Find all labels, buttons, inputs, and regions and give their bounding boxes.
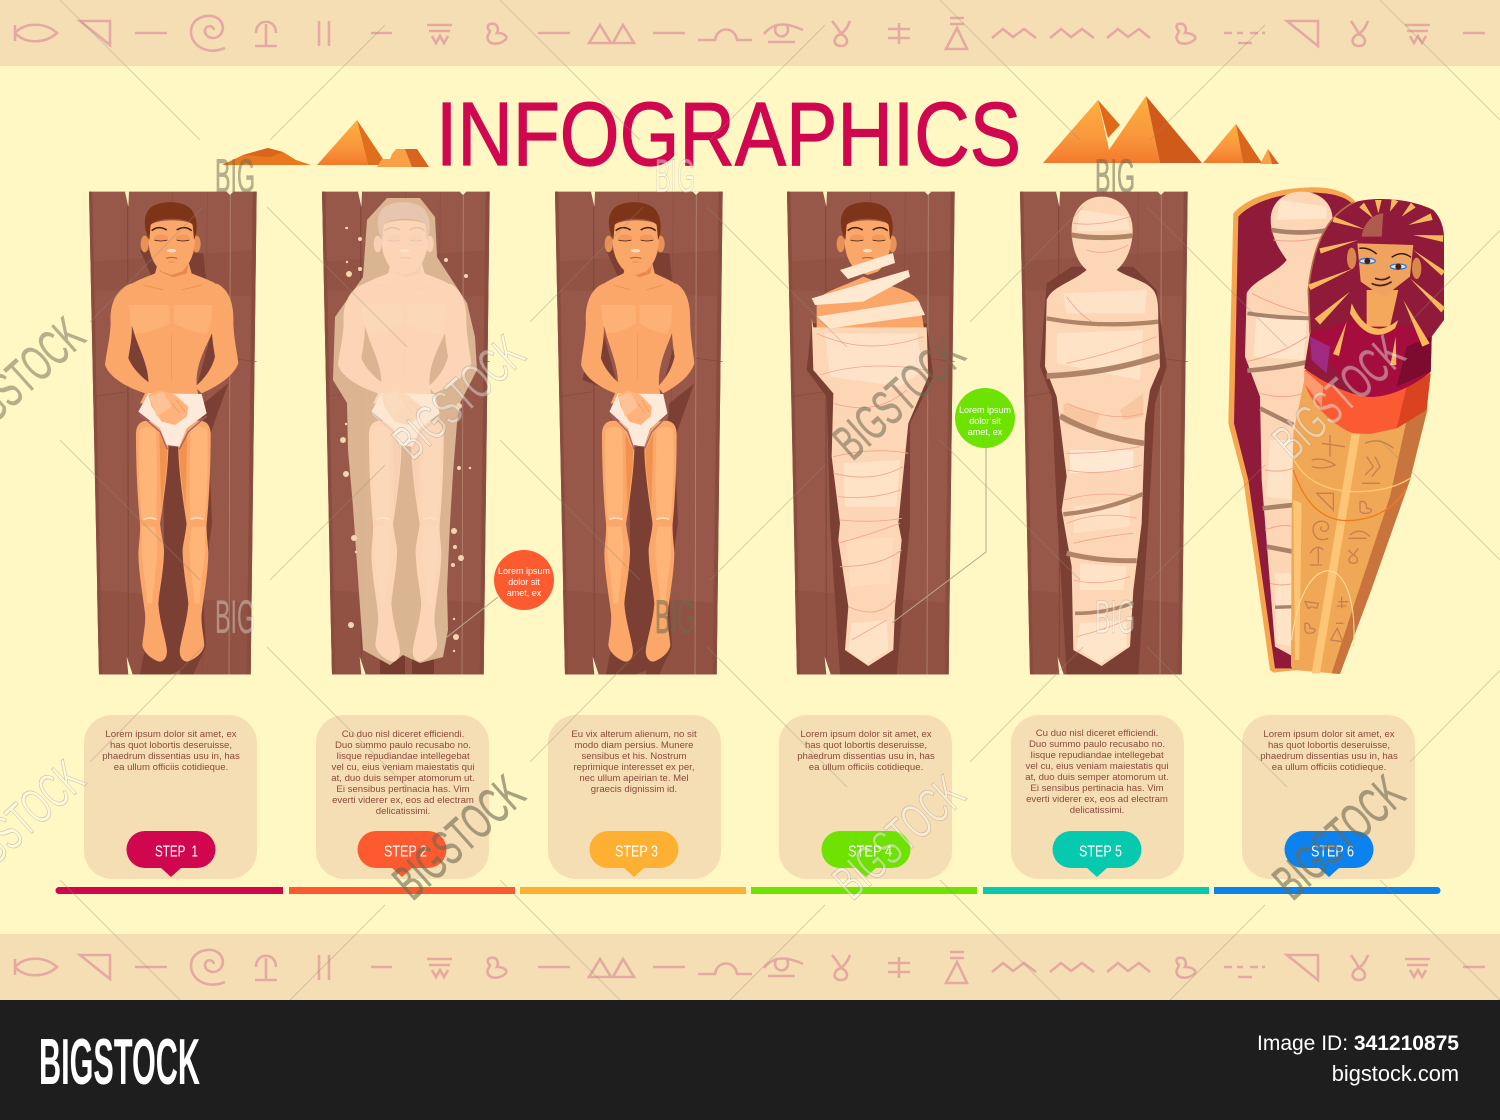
watermark: BIG stamps [215,149,1135,643]
watermark: BIG stamps: BIG [655,149,695,202]
step 1 text: ea ullum officiis cotidieque. [114,762,228,773]
callout: red circle with connector: amet, ex [507,588,542,598]
watermark: BIGSTOCK diagonals: BIGSTOCK [822,325,975,470]
watermark: BIGSTOCK diagonals: BIGSTOCK [382,325,535,470]
timeline bar [56,887,1440,894]
step card 1 [84,715,257,879]
watermark: BIGSTOCK diagonals: BIGSTOCK [1262,765,1415,910]
step 3 text: Eu vix alterum alienum, no sit [571,729,697,740]
callout: red circle with connector: Lorem ipsum [498,566,550,576]
watermark: BIG stamps: BIG [655,590,695,643]
step 5 text: Duo summo paulo recusabo no. [1029,739,1165,750]
watermark: BIGSTOCK diagonals: BIGSTOCK [382,765,535,910]
icon: pyramids left of title [222,120,429,167]
step 2 text: Cu duo nisl diceret efficiendi. [342,729,464,740]
callout: green circle with connector: amet, ex [968,427,1003,437]
step 6 illustration: sarcophagus [1228,187,1445,674]
step 4 text [797,729,935,773]
step 5 text [1025,728,1169,816]
step 5 text: everti viderer ex, eos ad electram [1026,794,1168,805]
step 1 text: Lorem ipsum dolor sit amet, ex [105,729,237,740]
step 6 badge: STEP 6 [1311,844,1354,860]
step card 2 [316,715,489,879]
sarcophagus lid body [1291,330,1432,674]
step 6 text: phaedrum dissentias usu in, has [1260,751,1398,762]
step 5 text: Ei sensibus pertinacia has. Vim [1030,783,1164,794]
title: INFOGRAPHICS [436,85,1021,185]
step 1 text: phaedrum dissentias usu in, has [102,751,240,762]
sarcophagus back shell [1228,187,1357,673]
step 4 badge: STEP 4 [848,844,892,860]
step 2 text: delicatissimi. [376,806,430,817]
step 6 text: Lorem ipsum dolor sit amet, ex [1263,729,1395,740]
step 2 illustration: ghostly man rising with particles [322,192,490,674]
step 1 badge [127,831,216,877]
footer bar [0,1000,1500,1120]
step 6 text [1260,729,1398,773]
step 2 text [331,729,475,817]
footer bar: BIGSTOCK [39,1025,200,1098]
step 4 text: phaedrum dissentias usu in, has [797,751,935,762]
watermark: BIGSTOCK diagonals: BIGSTOCK [822,765,975,910]
step 6 text: ea ullum officiis cotidieque. [1272,762,1386,773]
step 3 illustration: man with narrower upper body [555,192,723,674]
red collar band [1304,370,1430,434]
step 3 text: nec ullum apeirian te. Mel [579,773,689,784]
callout: red circle with connector [447,550,554,637]
step 2 text: Duo summo paulo recusabo no. [335,740,471,751]
watermark: BIG stamps: BIG [215,149,255,202]
step 6 text: has quot lobortis deseruisse, [1268,740,1390,751]
step card 6 [1242,715,1415,879]
step 3 text [571,729,697,795]
step 5 text: Iisque repudiandae intellegebat [1030,750,1164,761]
headdress [1304,199,1444,397]
callout: green circle with connector [892,388,1015,623]
step 5 text: delicatissimi. [1070,805,1124,816]
step 2 text: Iisque repudiandae intellegebat [336,751,470,762]
step 4 text: Lorem ipsum dolor sit amet, ex [800,729,932,740]
step 4 text: has quot lobortis deseruisse, [805,740,927,751]
top hieroglyph band [0,0,1500,66]
pharaoh face [1347,213,1421,335]
step 2 badge: STEP 2 [384,844,427,860]
text: BIG [1095,590,1135,643]
step 1 text: has quot lobortis deseruisse, [110,740,232,751]
step 2 text: vel cu, eius veniam maiestatis qui [332,762,474,773]
step 1 illustration: man on wooden board [89,192,257,674]
step 4 badge [822,831,910,877]
step 4 illustration: partly wrapped body [787,192,955,674]
text: BIG [1095,149,1135,202]
step 6 badge [1284,831,1374,877]
step 5 text: vel cu, eius veniam maiestatis qui [1026,761,1168,772]
watermark: BIG stamps: BIG [215,590,255,643]
step 3 text: graecis dignissim id. [591,784,677,795]
step 2 text: at, duo duis semper atomorum ut. [331,773,475,784]
bottom hieroglyph band [0,934,1500,1000]
footer image id: Image ID: 341210875 [1257,1032,1459,1055]
step 5 badge: STEP 5 [1079,844,1122,860]
watermark: BIGSTOCK diagonals [0,307,1415,910]
step card 3 [548,715,721,879]
callout: green circle with connector: Lorem ipsum [959,405,1011,415]
callout: red circle with connector: dolor sit [508,577,540,587]
step 5 text: at, duo duis semper atomorum ut. [1025,772,1169,783]
step 3 badge: STEP 3 [615,844,658,860]
step 1 text [102,729,240,773]
step 3 text: modo diam persius. Munere [575,740,693,751]
footer site: bigstock.com [1332,1061,1459,1086]
step 2 text: everti viderer ex, eos ad electram [332,795,474,806]
step card 4 [779,715,952,879]
step 5 badge [1052,831,1142,877]
step 3 text: reprimique interesset ex per, [573,762,695,773]
callout: green circle with connector: dolor sit [969,416,1001,426]
step 2 text: Ei sensibus pertinacia has. Vim [336,784,470,795]
wrapped mummy inside [1245,192,1333,657]
step 3 badge [590,831,679,877]
step card 5 [1011,715,1184,879]
icon: pyramids right of title [1043,96,1279,164]
step 5 illustration: fully wrapped mummy [1020,192,1188,674]
step 1 badge: STEP 1 [155,844,198,860]
step 3 text: sensibus et his. Nostrum [581,751,687,762]
step 5 text: Cu duo nisl diceret efficiendi. [1036,728,1158,739]
lid hieroglyphs [1305,435,1393,642]
step 2 badge [358,831,446,877]
watermark: BIGSTOCK diagonals: BIGSTOCK [1262,325,1415,470]
step 4 text: ea ullum officiis cotidieque. [809,762,923,773]
